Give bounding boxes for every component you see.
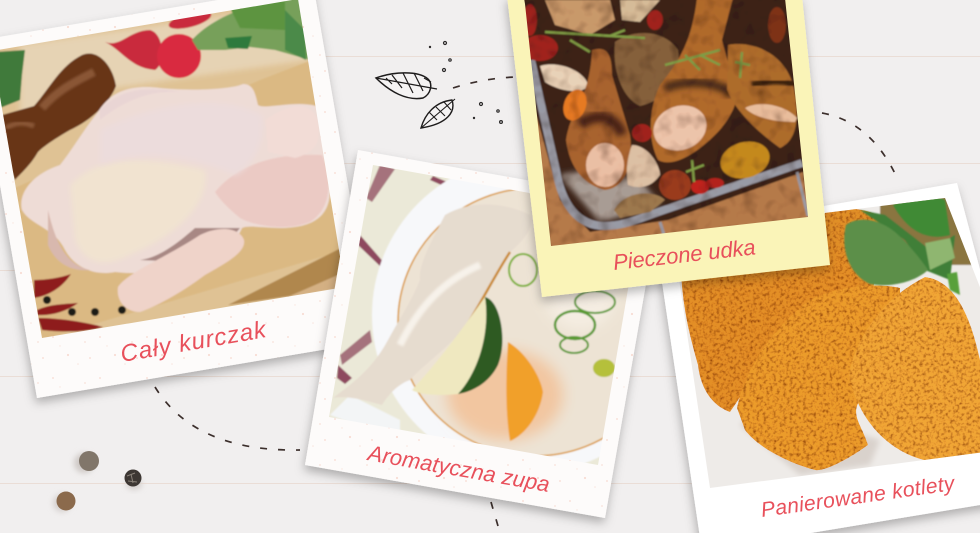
top left chicken: [545, 0, 615, 35]
caption: Pieczone udka: [612, 234, 757, 275]
garlic clove: [540, 64, 588, 91]
pepper slice: [593, 359, 615, 377]
panel: Panierowane kotlety: [655, 183, 980, 533]
dashed path: centre top: [453, 77, 516, 88]
bowl: [372, 179, 602, 463]
left herbs: [0, 50, 25, 108]
garlic bottom: [627, 145, 660, 187]
drumstick centre: [647, 0, 737, 162]
radishes: [105, 8, 213, 78]
scallion rings: [509, 254, 615, 353]
pepper mill: [1, 53, 116, 180]
orange pepper: [562, 88, 588, 122]
caption: Aromatyczna zupa: [364, 440, 552, 497]
dashed path: top right arc: [822, 113, 898, 180]
panel: Aromatyczna zupa: [305, 150, 688, 518]
dashed path: bottom left arc: [155, 387, 300, 450]
icon: small leaf: [421, 99, 455, 128]
decorative dots: [429, 42, 502, 123]
thyme: [545, 30, 750, 182]
yellow tomato: [719, 140, 771, 180]
panel: Pieczone udka: [507, 0, 830, 297]
card frame: [507, 0, 830, 297]
cutlets: [680, 208, 980, 470]
dashed path: bottom centre: [491, 502, 498, 526]
black pepper: [43, 296, 126, 316]
pan rim: [531, 60, 802, 226]
zucchini: [412, 297, 502, 395]
radish leaves: [192, 0, 310, 60]
chicken piece: [336, 206, 467, 404]
card frame: [305, 150, 660, 518]
chicken body: [21, 84, 330, 273]
chicken wing: [118, 229, 244, 312]
cloth stripes: [337, 165, 452, 396]
salad leaves: [844, 198, 960, 295]
red tomatoes: [522, 4, 786, 200]
peppercorns: [53, 451, 142, 512]
photo: roasted drumsticks: [520, 0, 815, 255]
chicken right: [727, 44, 797, 148]
pan floor: [560, 170, 660, 222]
soup: [396, 189, 628, 456]
orange slice: [506, 342, 543, 441]
icon: large leaf: [376, 73, 437, 99]
card frame: [655, 183, 980, 533]
card frame: [0, 0, 375, 398]
wooden table: [536, 113, 808, 246]
photo: chicken soup: [329, 165, 628, 465]
photo: breaded cutlets: [670, 190, 980, 495]
caption: Cały kurczak: [118, 316, 270, 368]
chillies: [34, 274, 103, 332]
panel: Cały kurczak: [0, 0, 375, 398]
photo: raw chicken: [0, 0, 350, 340]
drumstick left: [566, 49, 631, 190]
roast garlic: [614, 33, 679, 106]
caption: Panierowane kotlety: [759, 472, 957, 522]
